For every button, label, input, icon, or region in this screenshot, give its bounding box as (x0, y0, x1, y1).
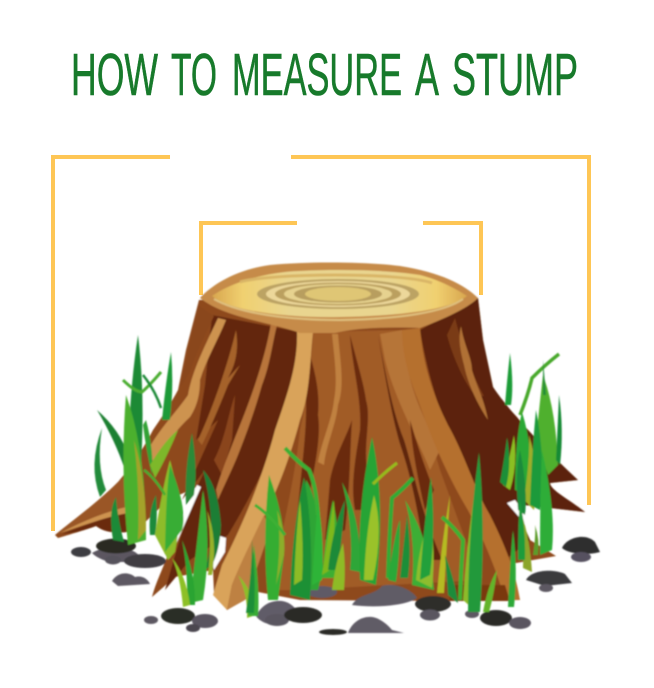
white gaps between roots (165, 485, 532, 570)
light bark streak left (148, 318, 226, 462)
title: MEASURE (232, 42, 402, 108)
grass: centre cluster (246, 437, 516, 613)
title: TO (171, 42, 217, 108)
rocks (71, 537, 600, 635)
stump top with growth rings (200, 262, 478, 333)
dark streaks in centre bark (296, 355, 319, 530)
inner bracket: top diameter measurement (201, 223, 481, 295)
stump trunk and roots (55, 298, 585, 610)
mid bark right streaks (447, 318, 484, 396)
light root rib right (402, 328, 520, 600)
centre bark tones (270, 330, 480, 590)
grass: lower-left cluster (172, 470, 258, 618)
light root rib centre (213, 332, 313, 610)
grass: right cluster (500, 353, 562, 572)
left root light edge (60, 505, 135, 533)
grass: left cluster (94, 335, 196, 560)
title: A (415, 42, 439, 108)
outer bracket: root spread measurement (53, 157, 589, 531)
dark bark left section (165, 315, 301, 590)
title: HOW (71, 42, 158, 108)
title: STUMP (452, 42, 578, 108)
dark bark right section (420, 298, 585, 560)
illustration: tree stump with grass and rocks (55, 262, 600, 635)
title (71, 42, 578, 108)
mid brown left panels (180, 305, 214, 388)
bottom base dark band (448, 585, 510, 601)
